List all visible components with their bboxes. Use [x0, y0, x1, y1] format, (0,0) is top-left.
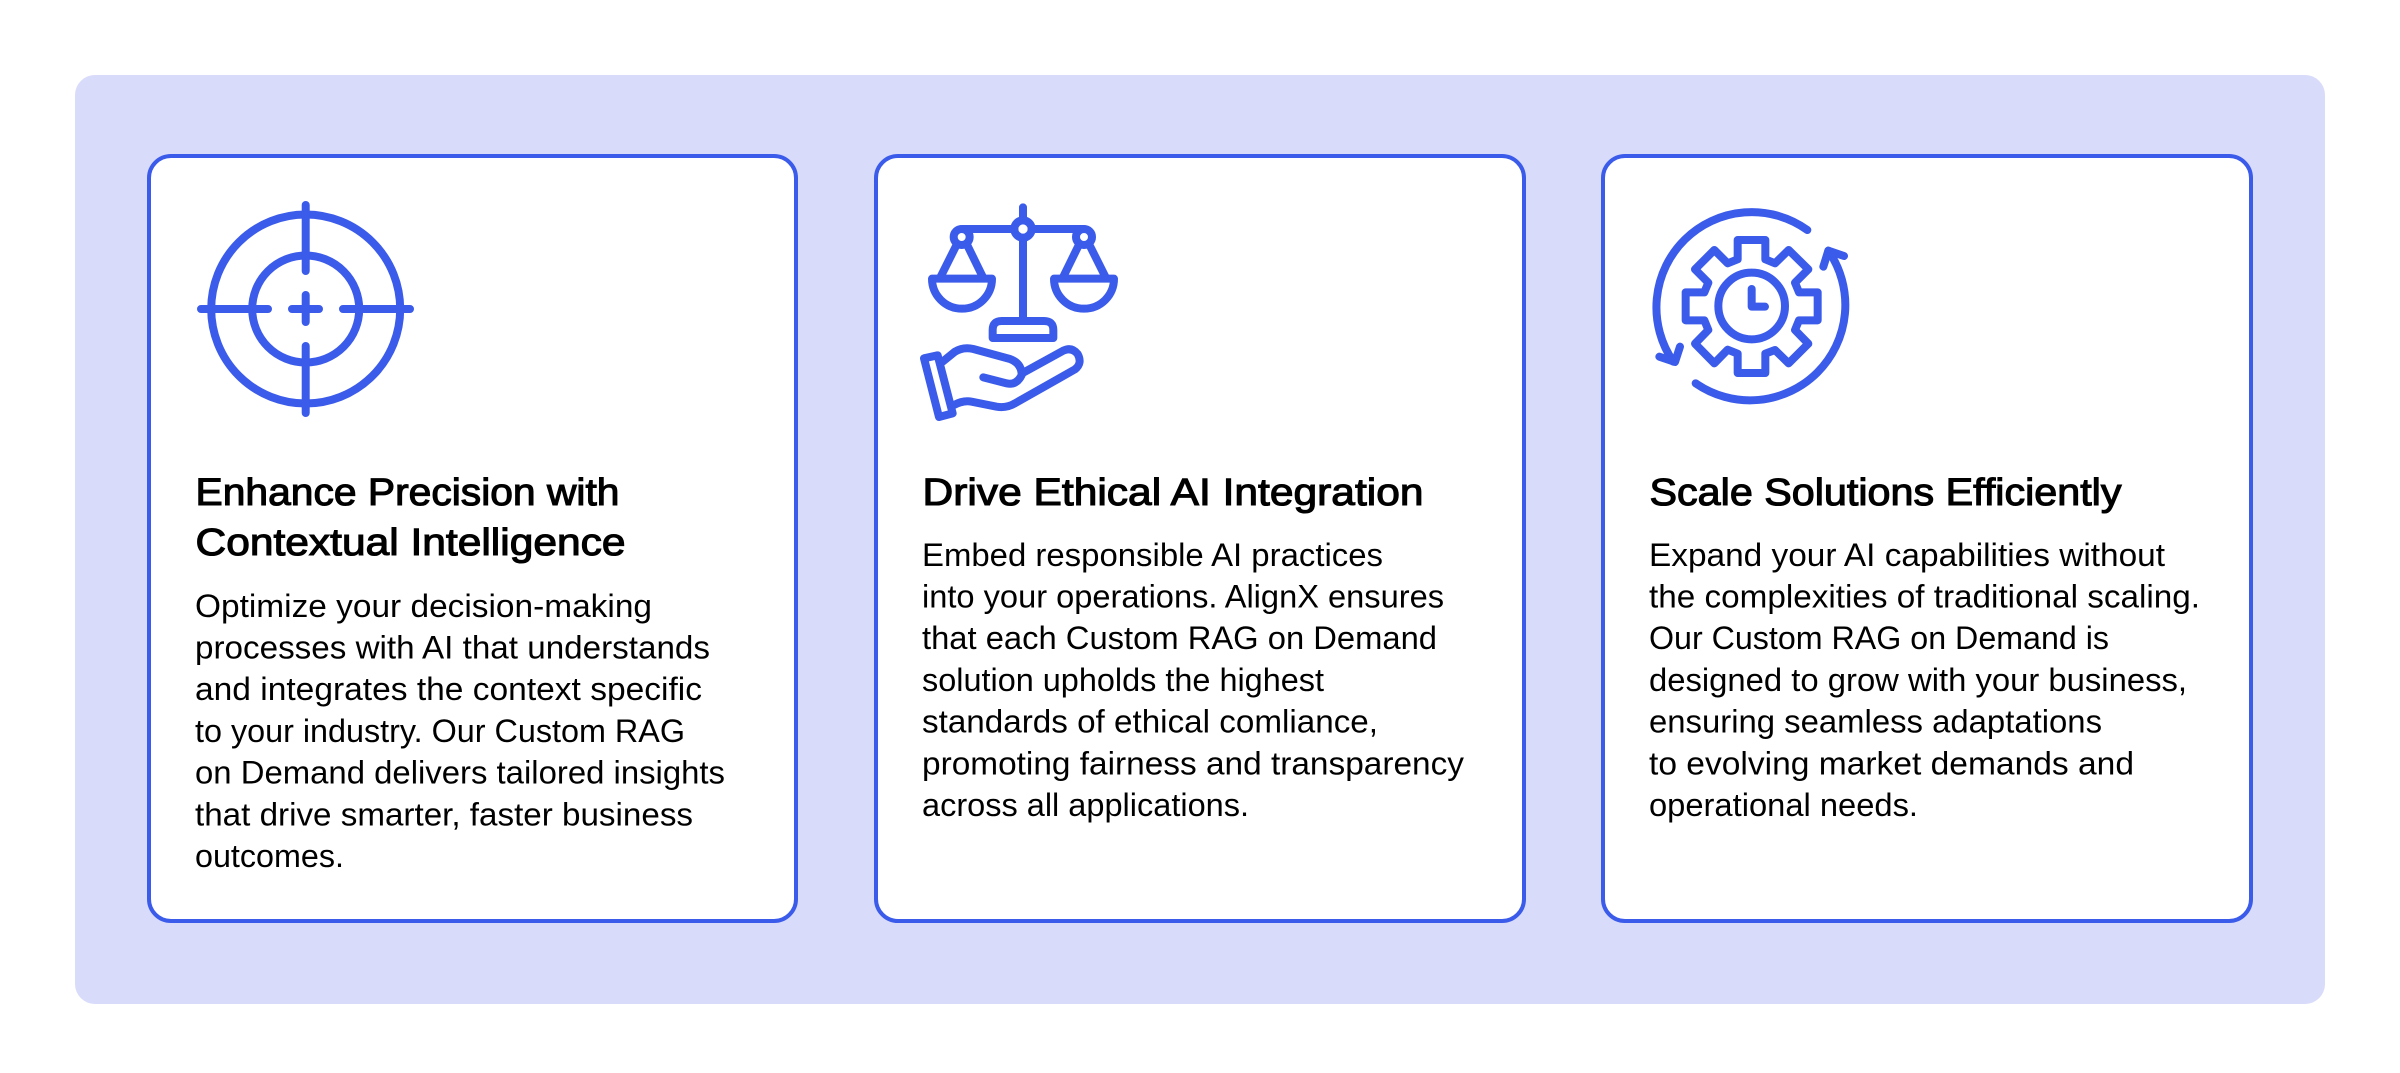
body text: designed to grow with your business, [1649, 662, 2187, 698]
body text: promoting fairness and transparency [922, 745, 1464, 781]
card frame [876, 156, 1524, 921]
card frame [1603, 156, 2251, 921]
icon: scales above open hand [924, 207, 1114, 417]
panel: ethical AI card [876, 156, 1524, 921]
panel: scale solutions card [1603, 156, 2251, 921]
body text [195, 588, 725, 874]
body text: Our Custom RAG on Demand is [1649, 620, 2109, 656]
heading: Contextual Intelligence [196, 522, 626, 564]
body text: Optimize your decision-making [195, 588, 652, 624]
heading: Drive Ethical AI Integration [922, 472, 1424, 514]
body text [1649, 537, 2200, 823]
body text: that each Custom RAG on Demand [922, 620, 1437, 656]
body text: and integrates the context specific [195, 671, 702, 707]
body text: processes with AI that understands [195, 630, 710, 666]
icon: target crosshair [201, 205, 410, 413]
heading [196, 472, 626, 564]
body text: ensuring seamless adaptations [1649, 703, 2102, 739]
body text: the complexities of traditional scaling. [1649, 579, 2200, 615]
body text: outcomes. [195, 838, 344, 874]
body text: that drive smarter, faster business [195, 796, 693, 832]
body text: operational needs. [1649, 787, 1918, 823]
card frame [149, 156, 796, 921]
body text: on Demand delivers tailored insights [195, 754, 725, 790]
body text [922, 537, 1464, 823]
body text: to evolving market demands and [1649, 745, 2134, 781]
body text: Embed responsible AI practices [922, 537, 1383, 573]
panel: enhance precision card [149, 156, 796, 921]
body text: into your operations. AlignX ensures [922, 579, 1444, 615]
heading: Enhance Precision with [196, 472, 620, 514]
icon: gear with clock and cycle arrows [1656, 212, 1845, 400]
body text: Expand your AI capabilities without [1649, 537, 2165, 573]
body text: to your industry. Our Custom RAG [195, 713, 685, 749]
body text: across all applications. [922, 787, 1249, 823]
heading: Scale Solutions Efficiently [1650, 472, 2122, 514]
body text: standards of ethical comliance, [922, 703, 1378, 739]
body text: solution upholds the highest [922, 662, 1324, 698]
